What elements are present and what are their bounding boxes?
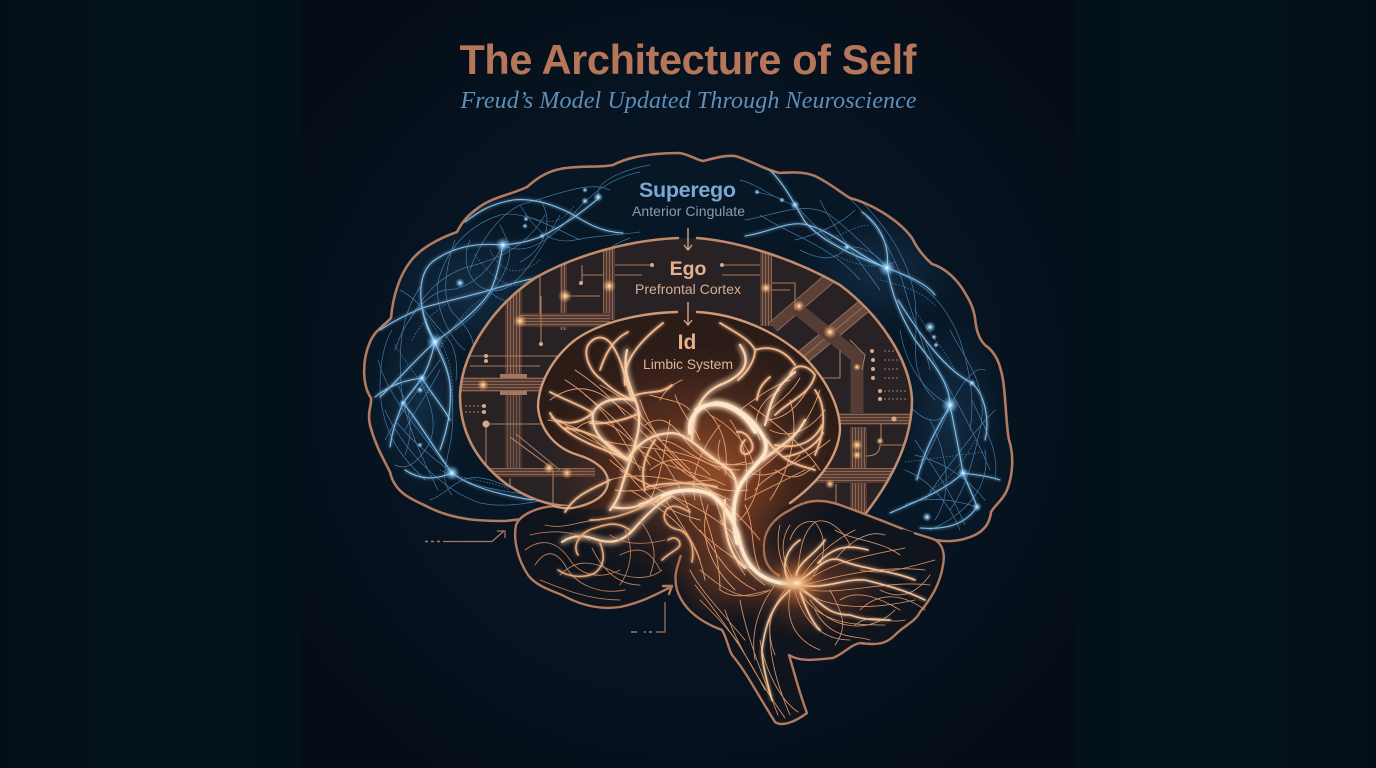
arrow: ego to id	[684, 302, 692, 325]
hot node: cerebellum centre	[779, 573, 815, 593]
callout arrow: brainstem	[631, 602, 665, 632]
label: id	[643, 331, 733, 372]
label: ego: Prefrontal Cortex	[635, 281, 741, 297]
label: superego	[632, 178, 745, 219]
blue neural waves left	[375, 165, 650, 505]
label: ego: Ego	[670, 258, 706, 280]
circuit traces	[460, 248, 912, 515]
temporal lobe filaments	[525, 497, 693, 600]
title: The Architecture of Self	[460, 36, 917, 83]
blue neural waves right	[740, 170, 1000, 530]
panel: superego cortex band	[364, 153, 1012, 541]
blue strands and glow	[370, 165, 1000, 530]
label: id: Limbic System	[643, 356, 733, 372]
arrow: superego to ego	[684, 228, 692, 250]
cerebellum filaments	[690, 521, 935, 718]
id border	[538, 312, 840, 508]
medium branches	[550, 323, 823, 512]
panel: lower brain lobes	[515, 500, 944, 724]
cerebellum and brainstem outline	[676, 501, 944, 724]
circuit nodes	[477, 279, 884, 489]
panel: ego prefrontal cortex	[460, 238, 912, 515]
main luminous trunks	[562, 345, 805, 584]
ego border	[460, 238, 912, 513]
label: ego	[635, 258, 741, 297]
subtitle: Freud’s Model Updated Through Neuroscience	[460, 88, 917, 114]
labels	[632, 178, 745, 372]
callout arrow: temporal lobe	[425, 531, 505, 542]
blue ambient glow	[384, 227, 984, 492]
brain diagram	[364, 153, 1012, 724]
label: id: Id	[678, 331, 696, 354]
blue light nodes	[399, 187, 982, 522]
label: superego: Superego	[639, 178, 736, 202]
orange glow	[545, 345, 895, 640]
panel: id limbic system	[538, 312, 895, 640]
label: superego: Anterior Cingulate	[632, 203, 745, 219]
temporal lobe outline	[515, 506, 672, 608]
fine filaments	[548, 370, 830, 590]
